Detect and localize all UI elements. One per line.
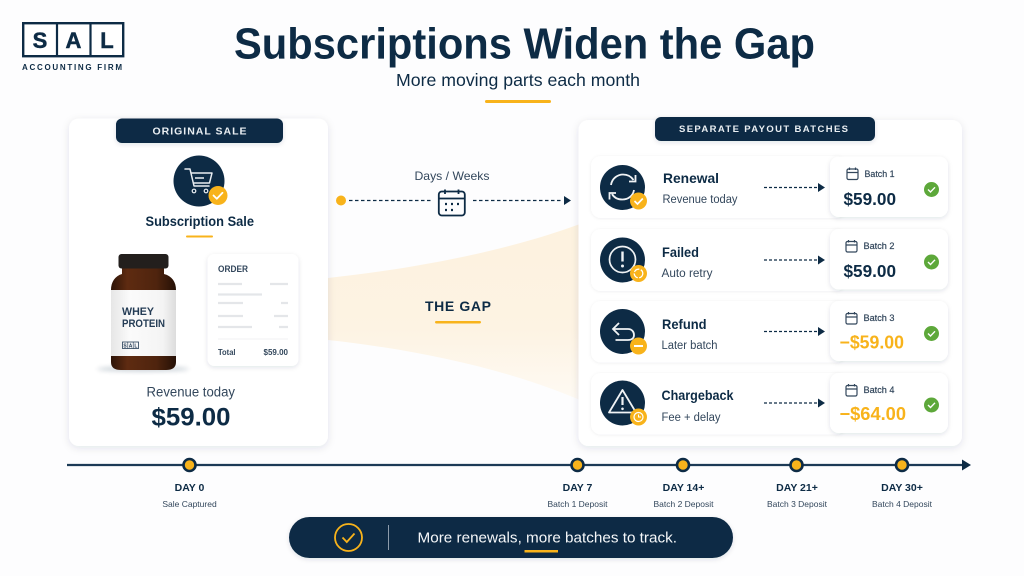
whey protein bottle: A [129, 344, 133, 350]
logo: SAL Accounting Firm: ACCOUNTING FIRM [22, 63, 122, 72]
batch 3 card: Batch 3 [864, 313, 894, 324]
batch 3 card: −$59.00 [840, 332, 904, 352]
heading: original sale: ORIGINAL SALE [152, 126, 246, 138]
row: failed: Failed [662, 244, 699, 260]
whey protein bottle: S [123, 344, 127, 350]
day 0 marker: DAY 0 [175, 482, 205, 494]
icon: renewal arrows [600, 165, 647, 210]
batch 1 card: Batch 1 [864, 169, 894, 180]
panel: original sale [69, 118, 328, 446]
icon: shopping cart with check [174, 156, 228, 206]
row: refund [591, 301, 846, 362]
icon: failed alert [600, 238, 647, 282]
batch 4 card [830, 373, 948, 433]
icon: refund arrow [600, 309, 647, 354]
panel: separate payout batches [578, 117, 962, 446]
heading: original sale [116, 118, 283, 143]
day 21 marker [767, 459, 828, 509]
batch 2 card: Batch 2 [864, 241, 894, 252]
the gap label [425, 298, 491, 324]
day 21 marker: Batch 3 Deposit [767, 499, 828, 509]
day 0 marker: Sale Captured [162, 499, 217, 509]
day 30 marker: Batch 4 Deposit [872, 499, 933, 509]
callout: more renewals, more batches: More renewals, more batches to track. [418, 530, 677, 546]
icon: chargeback warning [600, 380, 647, 426]
title: Subscriptions Widen the Gap [234, 20, 815, 68]
day 0 marker [162, 459, 217, 509]
whey protein bottle: WHEY [122, 306, 155, 318]
row: chargeback [591, 373, 846, 434]
row: renewal [591, 156, 846, 218]
order receipt card: ORDER [218, 264, 248, 275]
whey protein bottle [97, 254, 189, 372]
batch 1 card [830, 156, 948, 217]
row: refund: Refund [662, 316, 706, 332]
revenue today label: Revenue today [146, 384, 235, 400]
days / weeks connector: Days / Weeks [414, 169, 490, 183]
day 30 marker [872, 459, 933, 509]
day 7 marker [547, 459, 608, 509]
label: subscription sale: Subscription Sale [146, 214, 254, 229]
timeline [67, 459, 971, 509]
subtitle: More moving parts each month [396, 70, 640, 90]
day 14 marker [653, 459, 714, 509]
day 30 marker: DAY 30+ [881, 482, 923, 494]
order receipt card: $59.00 [264, 348, 289, 357]
batch 4 card: −$64.00 [840, 404, 906, 424]
row: refund: Later batch [662, 340, 718, 352]
revenue amount: $59.00 [152, 404, 230, 432]
logo: SAL Accounting Firm: L [100, 28, 114, 53]
callout: more renewals, more batches [289, 517, 733, 558]
the gap label: THE GAP [425, 298, 491, 314]
heading: separate payout batches: SEPARATE PAYOUT BATCHES [679, 124, 848, 135]
day 21 marker: DAY 21+ [776, 482, 818, 494]
row: renewal: Renewal [663, 170, 719, 186]
logo: SAL Accounting Firm: S [33, 28, 47, 53]
title accent bar [485, 100, 551, 103]
days / weeks connector [336, 169, 571, 216]
order receipt card [208, 254, 298, 366]
logo: SAL Accounting Firm: A [66, 28, 82, 53]
the gap wedge [328, 224, 580, 400]
row: renewal: Revenue today [662, 194, 738, 206]
row: failed [591, 229, 846, 291]
day 14 marker: DAY 14+ [663, 482, 704, 494]
batch 2 card [830, 229, 948, 290]
batch 1 card: $59.00 [844, 189, 896, 209]
whey protein bottle: L [134, 344, 137, 350]
icon: calendar [439, 190, 465, 216]
day 7 marker: Batch 1 Deposit [547, 499, 608, 509]
day 14 marker: Batch 2 Deposit [653, 499, 714, 509]
row: chargeback: Chargeback [662, 387, 734, 403]
whey protein bottle: PROTEIN [122, 318, 165, 330]
batch 3 card [830, 301, 948, 361]
icon: check circle [335, 524, 362, 551]
order receipt card: Total [218, 348, 236, 357]
batch 4 card: Batch 4 [864, 385, 894, 396]
day 7 marker: DAY 7 [563, 482, 593, 494]
logo: SAL Accounting Firm [22, 23, 123, 72]
heading: separate payout batches [655, 117, 875, 141]
row: failed: Auto retry [662, 268, 713, 280]
batch 2 card: $59.00 [844, 261, 896, 281]
row: chargeback: Fee + delay [662, 412, 721, 424]
